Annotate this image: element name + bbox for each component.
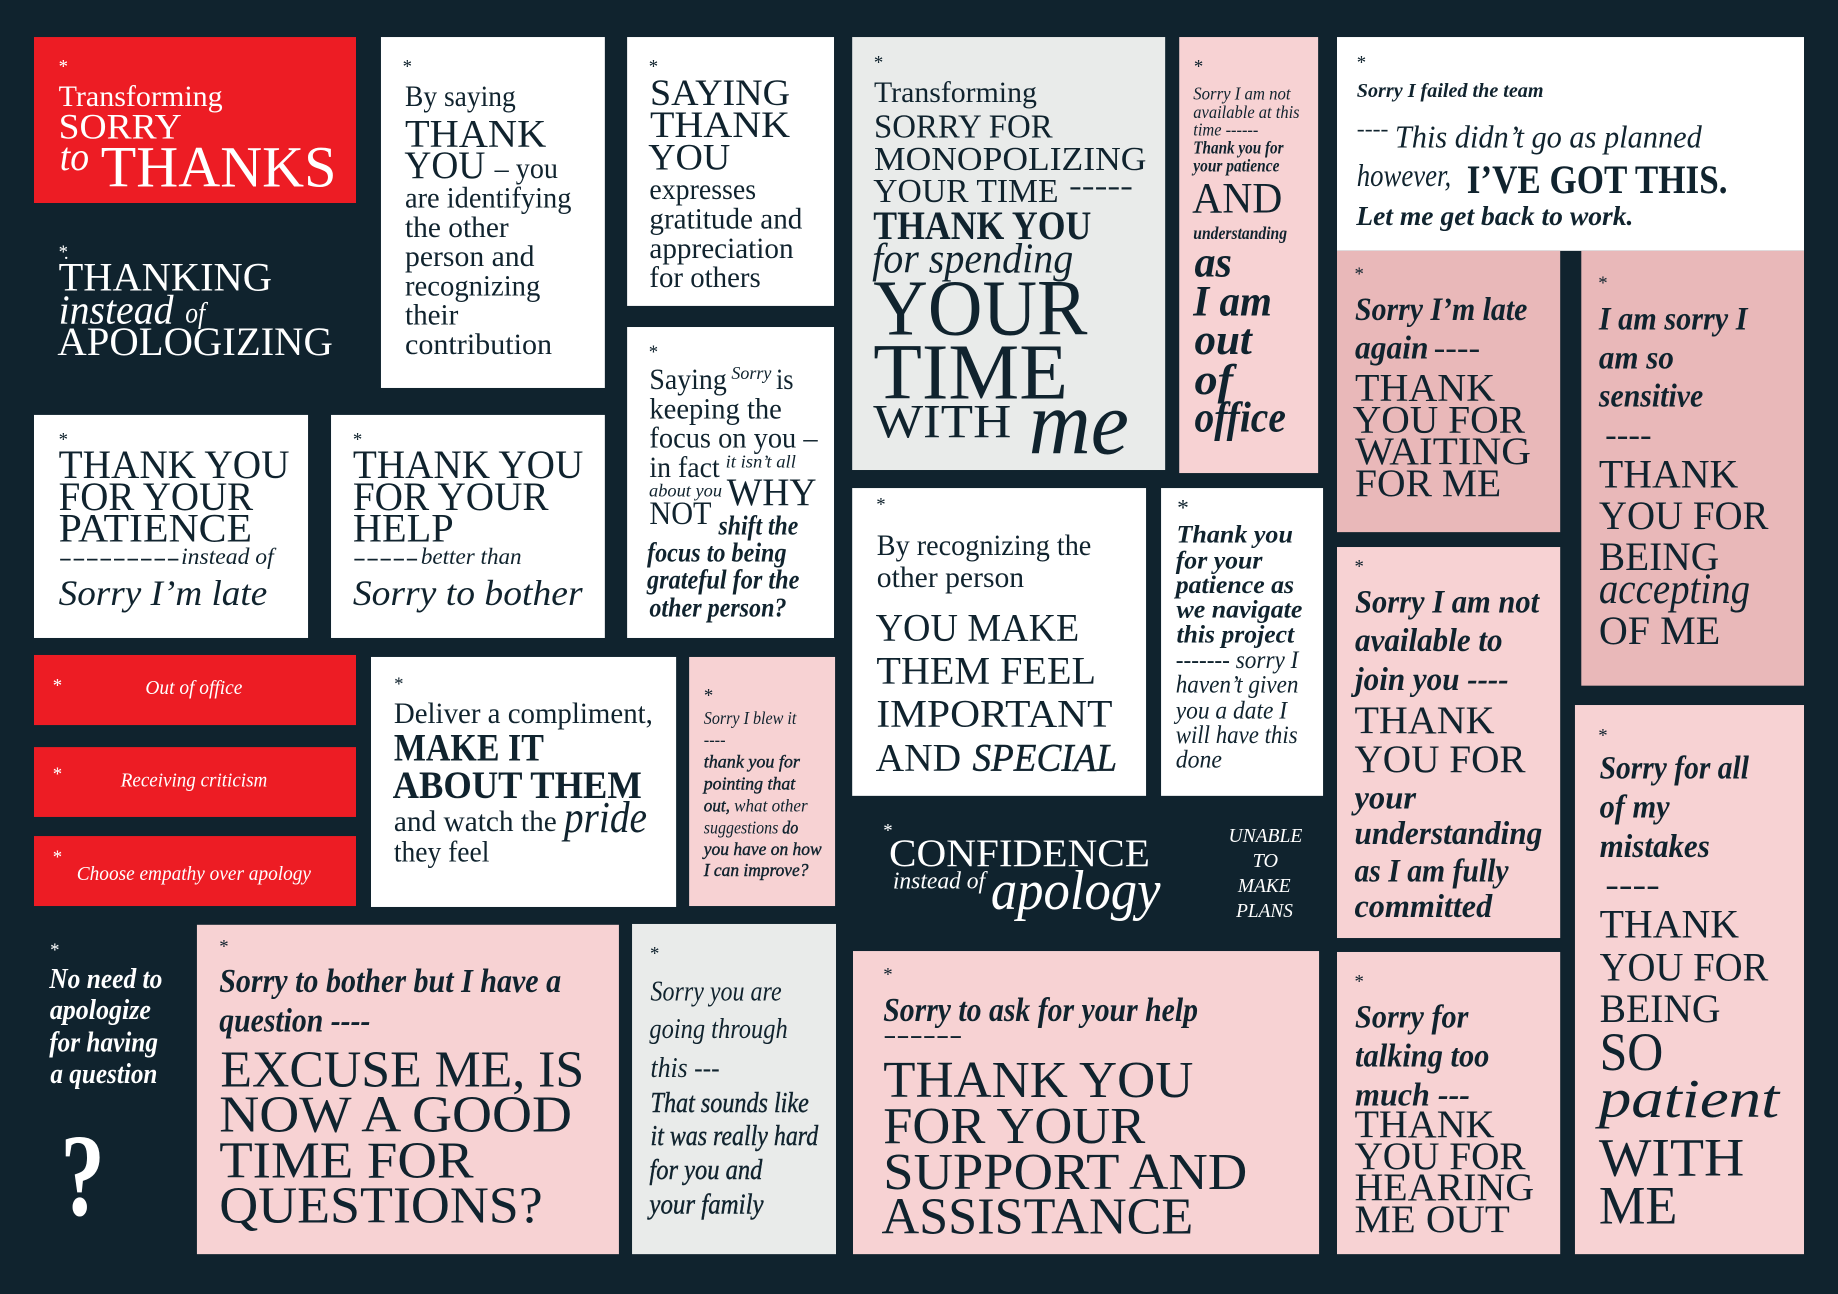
card background bbox=[627, 327, 834, 638]
text block: Saying bbox=[649, 364, 727, 396]
text block: SUPPORT AND bbox=[883, 1144, 1247, 1201]
text block: --------- bbox=[59, 545, 180, 571]
text block: SPECIAL bbox=[972, 738, 1117, 780]
text block: YOU FOR bbox=[1600, 944, 1769, 989]
text block: patient bbox=[1594, 1068, 1781, 1129]
card background bbox=[1337, 251, 1560, 532]
text block: SO bbox=[1600, 1022, 1663, 1082]
asterisk: * bbox=[53, 764, 62, 785]
panel: Sorry you are going through this bbox=[632, 924, 836, 1254]
text block: BEING bbox=[1600, 986, 1721, 1031]
text block: NOW A GOOD bbox=[219, 1087, 572, 1144]
text block bbox=[1354, 999, 1534, 1241]
label: Receiving criticism bbox=[120, 769, 267, 791]
panel: Sorry I'm late again bbox=[1337, 251, 1560, 532]
text block bbox=[872, 77, 1146, 474]
text block: TIME FOR bbox=[219, 1132, 474, 1189]
text block bbox=[1350, 585, 1542, 925]
text block: ---- bbox=[1357, 116, 1388, 141]
text block: AND bbox=[876, 738, 961, 780]
card background bbox=[852, 488, 1146, 796]
heading text bbox=[57, 255, 333, 364]
text block: No need to bbox=[48, 964, 162, 995]
text block: for you and bbox=[649, 1155, 763, 1186]
text block: FOR ME bbox=[1355, 463, 1501, 505]
panel: Receiving criticism bbox=[34, 747, 356, 817]
panel: Confidence instead of apology bbox=[883, 820, 1160, 922]
text block: Sorry I am not bbox=[1355, 585, 1540, 621]
text block bbox=[647, 976, 819, 1221]
text block: out bbox=[1194, 316, 1254, 364]
icon: question mark: ? bbox=[60, 1112, 105, 1241]
panel: Sorry to ask for your help bbox=[853, 951, 1319, 1254]
text block: is bbox=[776, 364, 794, 396]
text block: about you bbox=[649, 480, 722, 500]
heading text: CONFIDENCE bbox=[889, 833, 1150, 875]
text block bbox=[1192, 84, 1300, 441]
text block: pride bbox=[561, 792, 647, 842]
text block: HELP bbox=[353, 506, 454, 551]
text block: Sorry I am not bbox=[1193, 84, 1292, 104]
card background bbox=[34, 655, 356, 725]
text block: join you ---- bbox=[1350, 662, 1509, 698]
asterisk: * bbox=[650, 943, 659, 964]
text block: THANK YOU bbox=[353, 442, 583, 487]
heading text: instead bbox=[59, 287, 174, 332]
text block: Unable to make plans: MAKE bbox=[1237, 875, 1291, 897]
card background bbox=[1575, 705, 1804, 1254]
text block: available to bbox=[1355, 623, 1503, 659]
text block: ------ bbox=[883, 1020, 962, 1049]
text block: PATIENCE bbox=[59, 506, 252, 551]
text block: FOR YOUR bbox=[353, 474, 549, 519]
text block: OF ME bbox=[1599, 608, 1720, 653]
heading text bbox=[889, 833, 1160, 922]
asterisk: * bbox=[1354, 264, 1364, 285]
asterisk: * bbox=[876, 494, 886, 515]
text block: it was really hard bbox=[651, 1121, 819, 1152]
card background bbox=[371, 657, 676, 907]
text block: Unable to make plans: TO bbox=[1253, 850, 1278, 872]
text block: ME OUT bbox=[1354, 1199, 1510, 1241]
text block: in fact bbox=[649, 452, 720, 484]
asterisk: * bbox=[59, 429, 68, 450]
text block: better than bbox=[421, 544, 522, 570]
asterisk: * bbox=[1194, 57, 1203, 78]
text block: WHY bbox=[727, 472, 817, 514]
text block: YOU bbox=[648, 137, 730, 178]
heading text: of bbox=[185, 297, 209, 329]
text block: as I am fully bbox=[1354, 853, 1509, 889]
text block: accepting bbox=[1599, 565, 1750, 613]
text block bbox=[393, 698, 653, 868]
text block: FOR YOUR bbox=[59, 474, 254, 519]
text block: YOUR TIME bbox=[873, 173, 1058, 210]
text block: Unable to make plans: PLANS bbox=[1235, 900, 1293, 922]
text block: am so bbox=[1599, 340, 1674, 376]
title text: SORRY bbox=[59, 106, 182, 146]
text block: ------- sorry I bbox=[1176, 645, 1300, 674]
text block: ----- bbox=[1069, 171, 1133, 203]
text block: keeping the bbox=[649, 393, 782, 425]
text block: ME bbox=[1599, 1176, 1677, 1236]
text block: office bbox=[1194, 393, 1286, 441]
panel: By recognizing the other person bbox=[852, 488, 1146, 796]
text block: Unable to make plans: UNABLE bbox=[1228, 825, 1302, 847]
card background bbox=[1161, 488, 1323, 796]
text block: patience as bbox=[1174, 570, 1294, 599]
text block: are identifying bbox=[405, 182, 572, 214]
card background bbox=[1337, 952, 1560, 1254]
text block: YOU MAKE bbox=[876, 608, 1079, 650]
text block: contribution bbox=[405, 329, 552, 361]
panel: Thank you for your patience as we navigate this project bbox=[1161, 488, 1323, 796]
text block: shift the bbox=[718, 510, 798, 540]
text block: NOT bbox=[649, 496, 712, 532]
text block: focus to being bbox=[647, 537, 787, 567]
text block: ----- bbox=[353, 545, 418, 571]
text block: ---- bbox=[704, 729, 726, 749]
panel: Sorry I failed the team bbox=[1337, 37, 1804, 251]
asterisk: * bbox=[394, 674, 403, 695]
text block bbox=[702, 708, 822, 880]
text block: THANK bbox=[1355, 367, 1495, 409]
text block: FOR YOUR bbox=[883, 1098, 1146, 1155]
text block: Sorry to bother but I have a bbox=[219, 963, 561, 1000]
text block: THANK bbox=[405, 114, 546, 156]
text block: I can improve? bbox=[703, 860, 809, 880]
text block: this project bbox=[1177, 619, 1295, 648]
text block: Sorry you are bbox=[651, 976, 782, 1007]
text block: THANK bbox=[1599, 452, 1739, 497]
text block: YOU bbox=[404, 145, 485, 187]
text block: SORRY FOR bbox=[874, 109, 1053, 146]
text block: other person bbox=[877, 562, 1024, 594]
text block bbox=[1598, 301, 1769, 653]
text block bbox=[646, 363, 818, 623]
text block: THANK YOU bbox=[883, 1052, 1193, 1109]
text block: THEM FEEL bbox=[876, 650, 1096, 692]
card background bbox=[853, 951, 1319, 1254]
text block: Let me get back to work. bbox=[1355, 201, 1633, 231]
asterisk: * bbox=[704, 686, 713, 707]
text block: Sorry I’m late bbox=[1355, 292, 1527, 328]
title text: to bbox=[60, 134, 89, 179]
card background bbox=[1581, 251, 1804, 686]
card background bbox=[34, 37, 356, 203]
text block: THANK YOU bbox=[59, 442, 290, 487]
asterisk: * bbox=[219, 936, 229, 957]
heading text: apology bbox=[991, 860, 1160, 922]
text block: YOU FOR bbox=[1354, 1136, 1526, 1178]
text block: a question bbox=[50, 1059, 157, 1090]
asterisk: * bbox=[649, 57, 658, 78]
text block: understanding bbox=[1193, 223, 1287, 243]
text block: for spending bbox=[872, 236, 1073, 283]
text block bbox=[881, 992, 1247, 1246]
text block: this --- bbox=[651, 1053, 720, 1084]
text block: much --- bbox=[1355, 1077, 1470, 1113]
text block: MONOPOLIZING bbox=[874, 141, 1146, 178]
text block: sensitive bbox=[1598, 378, 1703, 414]
text block: ---- bbox=[1605, 867, 1660, 903]
text block bbox=[219, 963, 584, 1235]
text block: By saying bbox=[405, 81, 516, 113]
text block: AND bbox=[1192, 175, 1282, 223]
text block: I’VE GOT THIS. bbox=[1467, 157, 1727, 202]
text block: your family bbox=[647, 1190, 764, 1221]
panel: Sorry for talking too much bbox=[1337, 952, 1560, 1254]
title text bbox=[59, 81, 336, 199]
asterisk: * bbox=[403, 57, 412, 78]
text block bbox=[59, 442, 290, 613]
text block: for having bbox=[49, 1027, 158, 1058]
card background bbox=[1337, 547, 1560, 938]
text block: Sorry for bbox=[1355, 999, 1470, 1035]
card background bbox=[1337, 37, 1804, 251]
asterisk: * bbox=[353, 429, 362, 450]
text block: person and bbox=[405, 241, 535, 273]
label: Choose empathy over apology bbox=[77, 863, 311, 885]
text block: going through bbox=[649, 1014, 788, 1045]
text block: thank you for bbox=[704, 752, 800, 772]
text block: other person? bbox=[649, 593, 787, 623]
panel: By saying thank you bbox=[381, 37, 605, 388]
heading text: THANKING bbox=[59, 255, 272, 300]
panel: Thank you for your help bbox=[331, 415, 605, 638]
asterisk: * bbox=[874, 53, 883, 74]
card background bbox=[381, 37, 605, 388]
text block: Sorry for all bbox=[1600, 751, 1750, 787]
text block: THANK bbox=[650, 105, 790, 146]
text block: QUESTIONS? bbox=[219, 1178, 543, 1235]
asterisk: * bbox=[883, 964, 893, 985]
panel: Saying sorry keeps the focus on you bbox=[627, 327, 834, 638]
text block bbox=[1355, 80, 1727, 231]
card background bbox=[1179, 37, 1318, 473]
text block: for your bbox=[1176, 545, 1263, 574]
text block: as bbox=[1194, 239, 1232, 287]
text block: Sorry to ask for your help bbox=[883, 992, 1198, 1029]
text block: the other bbox=[405, 212, 509, 244]
panel: title Transforming Sorry to Thanks bbox=[34, 37, 356, 203]
panel: Thanking instead of apologizing bbox=[57, 242, 333, 364]
text block: Thank you bbox=[1177, 520, 1293, 549]
text block: available at this bbox=[1193, 102, 1300, 122]
text block bbox=[353, 442, 583, 613]
panel: Sorry I blew it bbox=[689, 657, 835, 906]
panel: Sorry I am not available to join you bbox=[1337, 547, 1560, 938]
text block: apologize bbox=[50, 995, 151, 1026]
text block: Sorry I’m late bbox=[59, 573, 267, 613]
panel: No need to apologize for having a question bbox=[48, 940, 162, 1241]
text block: ABOUT THEM bbox=[393, 765, 642, 807]
text block: ASSISTANCE bbox=[881, 1189, 1193, 1246]
panel: Out of office bbox=[34, 655, 356, 725]
text block: That sounds like bbox=[651, 1088, 809, 1119]
text block: you have on how bbox=[702, 839, 822, 859]
text block: YOU FOR bbox=[1599, 493, 1769, 538]
text block: YOUR bbox=[873, 265, 1088, 353]
text block: MAKE IT bbox=[394, 728, 544, 770]
asterisk: * bbox=[1357, 53, 1366, 74]
text block: I am bbox=[1192, 277, 1272, 325]
panel: Thank you for your patience bbox=[34, 415, 308, 638]
card background bbox=[331, 415, 605, 638]
text block: EXCUSE ME, IS bbox=[220, 1042, 584, 1099]
text block: your patience bbox=[1192, 156, 1280, 176]
text block bbox=[48, 964, 162, 1090]
text block: will have this bbox=[1176, 720, 1298, 749]
text block: HEARING bbox=[1354, 1167, 1534, 1209]
text block: of bbox=[1194, 356, 1238, 404]
card background bbox=[197, 925, 619, 1254]
card background bbox=[34, 836, 356, 906]
panel: Transforming sorry for monopolizing your time bbox=[852, 37, 1165, 474]
text block: your bbox=[1350, 781, 1417, 817]
text block: their bbox=[405, 300, 459, 332]
text block: talking too bbox=[1355, 1038, 1489, 1074]
text block: ---- bbox=[1605, 417, 1652, 453]
panel: Sorry I am not available / out of office bbox=[1179, 37, 1318, 473]
text block: recognizing bbox=[405, 270, 541, 302]
text block bbox=[1353, 292, 1531, 505]
text block: expresses bbox=[649, 174, 756, 206]
heading text: instead of bbox=[893, 867, 988, 894]
text block: time ------ bbox=[1193, 119, 1258, 139]
text block: you a date I bbox=[1173, 695, 1288, 724]
text block: This didn’t go as planned bbox=[1395, 119, 1702, 154]
text block: they feel bbox=[394, 836, 489, 868]
text block: gratitude and bbox=[649, 204, 803, 236]
heading text: APOLOGIZING bbox=[57, 319, 333, 364]
text block: it isn’t all bbox=[726, 452, 796, 472]
asterisk: * bbox=[59, 57, 68, 78]
text block: THANK bbox=[1354, 1104, 1495, 1146]
text block: IMPORTANT bbox=[876, 694, 1112, 736]
text block bbox=[876, 530, 1117, 780]
text block: THANK YOU bbox=[873, 203, 1091, 248]
text block: WITH bbox=[1599, 1128, 1744, 1188]
text block: again bbox=[1355, 331, 1428, 367]
text block: THANK bbox=[1600, 902, 1739, 947]
card background bbox=[689, 657, 835, 906]
panel: Sorry to bother but I have a question bbox=[197, 925, 619, 1254]
text block: Sorry bbox=[731, 363, 772, 383]
title text: THANKS bbox=[101, 134, 336, 199]
text block: for others bbox=[649, 262, 761, 294]
text block: – you bbox=[494, 153, 558, 185]
card background bbox=[632, 924, 836, 1254]
card background bbox=[852, 37, 1165, 470]
text block: Deliver a compliment, bbox=[394, 698, 653, 730]
text block: grateful for the bbox=[646, 564, 799, 594]
text block bbox=[1173, 520, 1302, 774]
text block: Sorry to bother bbox=[353, 573, 583, 613]
text block: instead of bbox=[181, 544, 277, 570]
asterisk: * bbox=[1354, 557, 1364, 578]
text block: Transforming bbox=[874, 77, 1037, 109]
asterisk: * bbox=[1598, 725, 1608, 746]
text block: I am sorry I bbox=[1598, 301, 1749, 337]
text block: we navigate bbox=[1177, 595, 1302, 624]
text block: pointing that bbox=[702, 773, 796, 793]
text block bbox=[404, 81, 572, 361]
text block: By recognizing the bbox=[877, 530, 1091, 562]
asterisk: * bbox=[883, 820, 893, 841]
text block: focus on you – bbox=[649, 423, 818, 455]
panel: Sorry for all of my mistakes bbox=[1575, 705, 1804, 1254]
text block: understanding bbox=[1354, 816, 1542, 852]
card background bbox=[34, 415, 308, 638]
title text: Transforming bbox=[59, 81, 223, 113]
text block: committed bbox=[1354, 889, 1493, 925]
asterisk: * bbox=[59, 242, 68, 263]
text block: SAYING bbox=[650, 73, 790, 114]
text block bbox=[1594, 751, 1781, 1236]
asterisk: * bbox=[1598, 273, 1608, 294]
text block: YOU FOR bbox=[1353, 399, 1525, 441]
text block: YOU FOR bbox=[1354, 739, 1526, 781]
text block: BEING bbox=[1599, 534, 1719, 579]
panel: Deliver a compliment bbox=[371, 657, 676, 907]
label: Out of office bbox=[145, 677, 243, 699]
text block: WAITING bbox=[1355, 431, 1531, 473]
text block: TIME bbox=[873, 329, 1068, 417]
text block: Sorry I failed the team bbox=[1357, 80, 1544, 102]
asterisk: * bbox=[53, 676, 62, 697]
text block: appreciation bbox=[649, 233, 794, 265]
text block: Sorry I blew it bbox=[704, 708, 797, 728]
text block bbox=[648, 73, 803, 294]
panel: Saying thank you bbox=[627, 37, 834, 306]
text block: haven’t given bbox=[1176, 670, 1298, 699]
text block: out, what other bbox=[704, 795, 808, 815]
text block: however, bbox=[1357, 158, 1451, 193]
text block: ---- bbox=[1434, 331, 1480, 367]
asterisk: * bbox=[1177, 496, 1189, 522]
card background bbox=[627, 37, 834, 306]
text block: suggestions do bbox=[704, 817, 798, 837]
text block: me bbox=[1029, 373, 1129, 474]
text block: done bbox=[1176, 745, 1222, 774]
text block: mistakes bbox=[1600, 829, 1710, 865]
text block: question ---- bbox=[219, 1002, 370, 1039]
asterisk: * bbox=[649, 342, 658, 363]
text block: THANK bbox=[1354, 700, 1495, 742]
asterisk: * bbox=[53, 847, 62, 868]
text block: and watch the bbox=[394, 806, 557, 838]
asterisk: * bbox=[1354, 971, 1364, 992]
card background bbox=[34, 747, 356, 817]
panel: Choose empathy over apology bbox=[34, 836, 356, 906]
panel: I am sorry I am so sensitive bbox=[1581, 251, 1804, 686]
asterisk: * bbox=[50, 940, 60, 961]
text block: Thank you for bbox=[1193, 138, 1284, 158]
text block: Unable to make plans bbox=[1228, 825, 1302, 922]
text block: of my bbox=[1600, 790, 1670, 826]
text block: WITH bbox=[873, 396, 1011, 449]
